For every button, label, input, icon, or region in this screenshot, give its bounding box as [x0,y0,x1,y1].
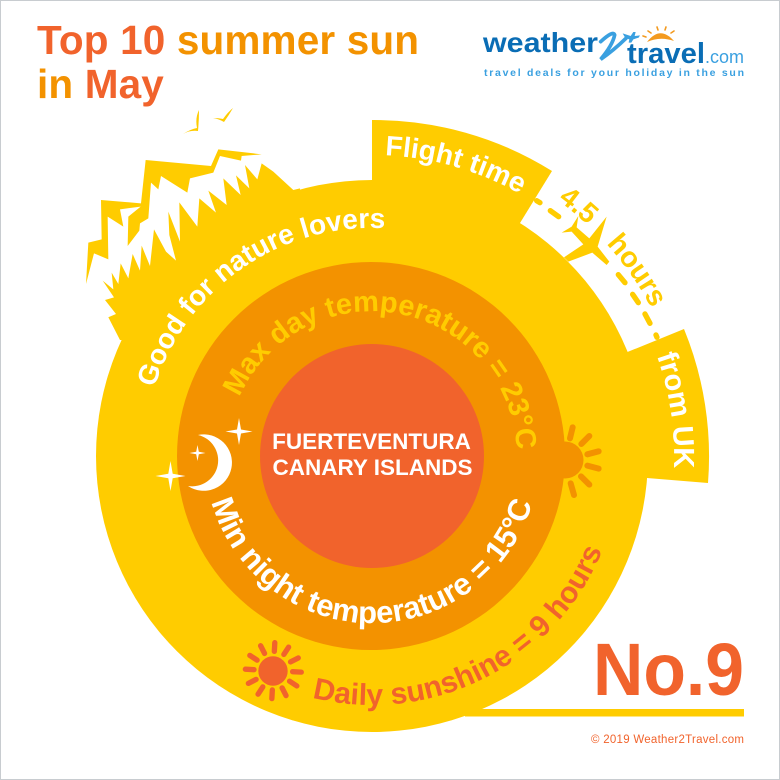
logo: weather2travel.com [482,27,744,79]
logo: weather2travel.com: travel [627,38,705,70]
bottom rule [465,709,744,716]
birds [183,108,233,134]
panel: orange ring [177,262,565,650]
panel: flight time sector [372,120,552,456]
text: flight time: Flight time [386,136,524,192]
text: good for nature lovers: Good for nature lovers [138,212,384,384]
centre label: FUERTEVENTURA [272,429,471,454]
title: in May [37,61,164,107]
icon: moon and stars [156,418,252,491]
title: Top 10 summer sun [37,17,419,63]
flight path dashes [537,201,657,337]
text: max day temperature: Max day temperature = 23°C [222,296,536,448]
grass [103,163,300,340]
copyright: © 2019 Weather2Travel.com [591,734,744,746]
centre label [272,429,473,480]
panel: from UK sector [372,329,709,483]
logo: weather2travel.com: .com [705,47,744,67]
panel: centre circle [260,344,484,568]
text: hours: hours [608,232,662,306]
logo: weather2travel.com: travel deals for your holiday in the sun [484,67,744,79]
logo: weather2travel.com: weather [482,27,598,58]
text: from UK: from UK [658,351,694,468]
text: min night temperature: Min night temperature = 15°C [212,496,530,630]
rank: No.9: No.9 [593,628,744,711]
centre label: CANARY ISLANDS [272,455,473,480]
text: 4.5: 4.5 [560,190,600,222]
mountains [86,149,262,284]
text: daily sunshine: Daily sunshine = 9 hours [314,547,600,712]
title [37,17,419,107]
panel: yellow disc [96,180,648,732]
icon: day sun [546,427,599,495]
icon: plane [562,216,609,265]
icon: sunshine sun [245,643,301,699]
